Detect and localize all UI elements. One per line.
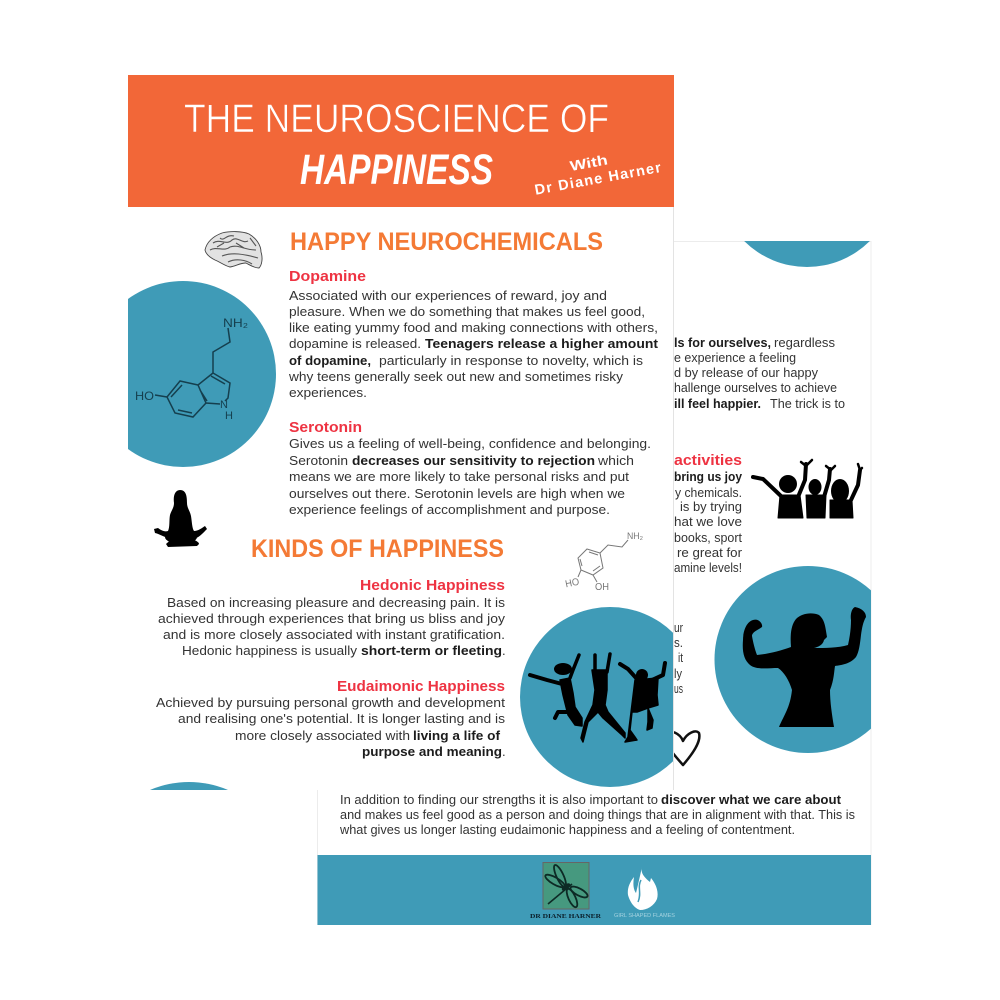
text block: serotonin: ourselves out there. Serotonin levels are high when we — [289, 486, 625, 501]
text block: setting goals — [674, 335, 845, 411]
text block: strengths fragments: ly — [674, 666, 682, 681]
header band — [128, 75, 674, 207]
circle: back page top — [744, 241, 870, 267]
text block: dopamine: particularly in response to novelty, which is — [379, 353, 644, 368]
text block: eudaimonic happiness — [156, 678, 506, 759]
text block: eudaimonic happiness: more closely associated with — [235, 728, 410, 743]
text block: hedonic happiness: short-term or fleeting — [361, 643, 502, 658]
icon: heart outline — [665, 731, 699, 765]
text block: eudaimonic happiness: . — [502, 744, 506, 759]
text block: dopamine: dopamine is released. — [289, 336, 421, 351]
text block: eudaimonic happiness: Achieved by pursuing personal growth and development — [156, 695, 505, 710]
text block: serotonin: means we are more likely to take personal risks and put — [289, 469, 629, 484]
circle: jumping people — [520, 607, 673, 787]
icon: dopamine molecule: OH — [595, 582, 609, 593]
text block: activities: activities — [674, 452, 742, 469]
text block: strengths fragments: ur — [674, 620, 684, 635]
title: happiness: HAPPINESS — [300, 146, 493, 194]
logo text: Girl Shaped Flames: GIRL SHAPED FLAMES — [614, 913, 675, 919]
icon: meditating woman — [154, 490, 207, 547]
text block: hedonic happiness: Hedonic Happiness — [360, 577, 505, 594]
icon: molecule: H — [225, 410, 233, 422]
icon: jumping silhouettes — [530, 654, 665, 742]
logo: flame — [628, 867, 658, 910]
icon: brain — [205, 232, 262, 268]
text block: dopamine: experiences. — [289, 385, 367, 400]
text block: dopamine: Teenagers release a higher amount — [425, 336, 659, 351]
text block: setting goals: hallenge ourselves to achieve — [674, 380, 837, 395]
text block: strengths fragments: it — [678, 650, 683, 665]
text block: strengths fragments — [674, 620, 684, 696]
text block: setting goals: ls for ourselves, — [674, 335, 771, 350]
text block: hedonic happiness: . — [502, 643, 506, 658]
icon: molecule — [135, 316, 248, 422]
text block: dopamine: why teens generally seek out new and sometimes risky — [288, 369, 624, 384]
text block: hedonic happiness: Hedonic happiness is usually — [182, 643, 358, 658]
text block: hedonic happiness — [158, 577, 506, 658]
text block: finding what we care about: In addition to finding our strengths it is also important to — [340, 792, 658, 807]
icon: molecule: N — [220, 399, 228, 411]
text block: activities: bring us joy — [674, 469, 743, 484]
circle: front page bottom — [150, 782, 228, 790]
text block: setting goals: The trick is to — [770, 396, 845, 411]
text block: finding what we care about — [339, 792, 855, 837]
text block: finding what we care about: discover what we care about — [661, 792, 842, 807]
panel: front page — [128, 75, 674, 790]
text block: setting goals: d by release of our happy — [674, 365, 818, 380]
text block: dopamine: of dopamine, — [289, 353, 371, 368]
circle: strength silhouette — [714, 566, 871, 753]
text block: serotonin: Gives us a feeling of well-being, confidence and belonging. — [289, 436, 651, 451]
text block: dopamine: pleasure. When we do something that makes us feel good, — [289, 304, 645, 319]
text block: setting goals: regardless — [774, 335, 835, 350]
byline — [530, 142, 663, 199]
text block: activities: books, sport — [674, 530, 742, 545]
text block: activities — [674, 452, 743, 575]
text block: dopamine — [288, 268, 659, 400]
panel: footer band — [318, 855, 871, 925]
icon: molecule: HO — [135, 389, 154, 403]
heading: kinds of happiness: KINDS OF HAPPINESS — [251, 535, 504, 563]
text block: setting goals: ill feel happier. — [674, 396, 761, 411]
byline: Dr Diane Harner — [533, 160, 663, 199]
icon: flexing woman — [743, 607, 866, 727]
circle: serotonin molecule — [128, 281, 276, 467]
icon: dopamine molecule: HO — [564, 577, 581, 590]
text block: setting goals: e experience a feeling — [674, 350, 796, 365]
text block: dopamine: Dopamine — [289, 268, 366, 285]
icon: molecule: NH₂ — [223, 316, 248, 330]
title: THE NEUROSCIENCE OF — [184, 97, 609, 141]
text block: dopamine: Associated with our experiences of reward, joy and — [289, 288, 607, 303]
logo: dragonfly — [543, 862, 589, 909]
icon: dopamine molecule: NH₂ — [627, 531, 643, 541]
text block: serotonin: Serotonin — [289, 419, 362, 436]
text block: eudaimonic happiness: purpose and meaning — [362, 744, 502, 759]
text block: strengths fragments: us — [674, 681, 683, 696]
text block: serotonin: Serotonin — [289, 453, 348, 468]
text block: activities: y chemicals. — [675, 485, 742, 500]
logo text: Dr Diane Harner: DR DIANE HARNER — [530, 913, 601, 920]
text block: activities: amine levels! — [674, 560, 742, 575]
text block: finding what we care about: what gives us longer lasting eudaimonic happiness and a feeling of contentment. — [339, 822, 795, 837]
text block: serotonin — [289, 419, 651, 517]
text block: activities: hat we love — [674, 514, 742, 529]
icon: three women cheering — [753, 460, 862, 518]
text block: eudaimonic happiness: Eudaimonic Happiness — [337, 678, 505, 695]
byline: With — [569, 151, 609, 174]
text block: hedonic happiness: achieved through experiences that bring us bliss and joy — [158, 611, 506, 626]
text block: serotonin: experience feelings of accomplishment and purpose. — [289, 502, 610, 517]
text block: strengths fragments: s. — [674, 635, 683, 650]
icon: dopamine molecule — [564, 531, 643, 593]
text block: eudaimonic happiness: living a life of — [413, 728, 501, 743]
panel: back page — [317, 241, 872, 925]
text block: dopamine: like eating yummy food and making connections with others, — [289, 320, 658, 335]
text block: serotonin: which — [597, 453, 634, 468]
text block: finding what we care about: and makes us feel good as a person and doing things that are in alignment with that. This is — [340, 807, 855, 822]
text block: serotonin: decreases our sensitivity to rejection — [352, 453, 595, 468]
text block: activities: is by trying — [680, 499, 742, 514]
text block: eudaimonic happiness: and realising one's potential. It is longer lasting and is — [178, 711, 506, 726]
text block: hedonic happiness: and is more closely associated with instant gratification. — [163, 627, 505, 642]
heading: happy neurochemicals: HAPPY NEUROCHEMICALS — [290, 228, 603, 256]
text block: activities: re great for — [677, 545, 743, 560]
text block: hedonic happiness: Based on increasing pleasure and decreasing pain. It is — [167, 595, 506, 610]
